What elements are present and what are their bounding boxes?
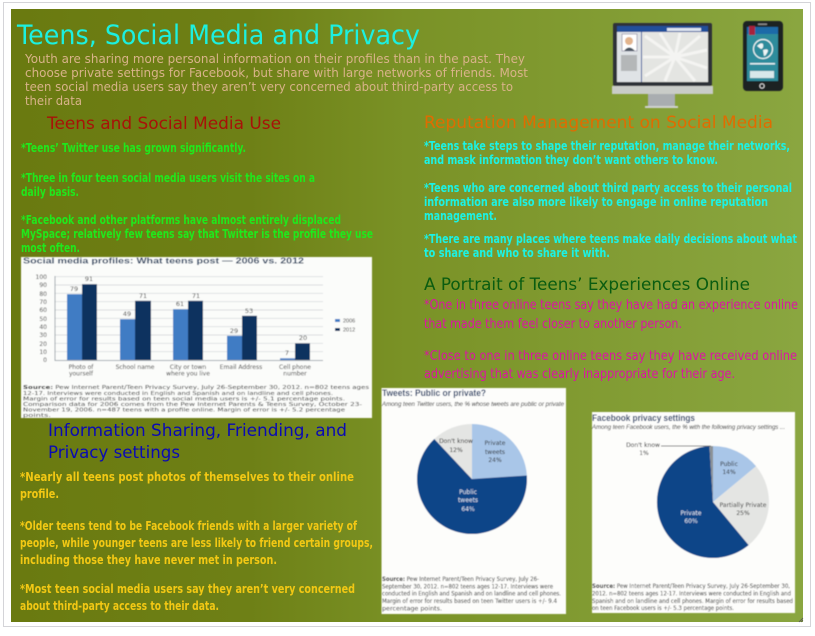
heading: portrait of teens: A Portrait of Teens’ Experiences Online xyxy=(424,275,750,295)
bar chart: what teens post: 70 xyxy=(39,299,47,306)
text block: social media use: MySpace; relatively few teens say that Twitter is the profile they use xyxy=(21,226,373,241)
text block: information sharing xyxy=(20,469,373,613)
text block: portrait of teens: that made them feel closer to another person. xyxy=(424,317,682,332)
bar chart: what teens post: Cell phone xyxy=(279,364,311,371)
bar chart: what teens post: 91 xyxy=(85,275,93,283)
pie chart: facebook privacy settings: Private xyxy=(681,510,702,517)
title: Teens, Social Media and Privacy xyxy=(16,20,420,51)
text block: information sharing: *Older teens tend to be Facebook friends with a larger variety of xyxy=(20,518,357,533)
pie chart: tweets public or private: 64% xyxy=(461,506,475,513)
text block: reputation management: and mask information they don’t want others to know. xyxy=(424,152,718,167)
icon: smartphone xyxy=(743,21,783,91)
pie chart: tweets public or private: Private xyxy=(485,440,506,447)
heading: information sharing xyxy=(48,421,347,463)
bar chart: what teens post: November 19, 2006. n=487 teens with a profile online. Margin of error is +/- 5.2 percentage xyxy=(23,408,346,414)
bar chart: what teens post: 60 xyxy=(39,307,47,314)
intro paragraph: teen social media users say they aren’t very concerned about third-party access to xyxy=(25,80,513,95)
bar chart: what teens post: 50 xyxy=(39,316,47,323)
pie chart: facebook privacy settings: 25% xyxy=(736,510,750,517)
pie chart: tweets public or private: tweets xyxy=(485,449,505,456)
text block: social media use: *Three in four teen social media users visit the sites on a xyxy=(21,170,315,185)
pie chart: tweets public or private: tweets xyxy=(458,497,478,504)
pie chart: tweets public or private: 24% xyxy=(488,457,502,464)
pie chart: facebook privacy settings: 1% xyxy=(639,450,649,457)
text block: information sharing: about third-party access to their data. xyxy=(20,598,219,613)
text block: social media use: daily basis. xyxy=(21,184,79,199)
pie chart: facebook privacy settings: Don't know xyxy=(626,442,660,449)
pie chart: tweets public or private: conducted in English and Spanish and on landline and cell phones. xyxy=(382,590,561,598)
intro paragraph: Youth are sharing more personal information on their profiles than in the past. They xyxy=(24,52,525,67)
bar chart: what teens post: 71 xyxy=(139,292,147,300)
pie chart: facebook privacy settings: Public xyxy=(720,461,738,468)
bar chart: what teens post: 20 xyxy=(39,341,47,348)
intro paragraph: their data xyxy=(25,94,82,109)
bar chart: what teens post: Email Address xyxy=(220,364,262,371)
text block: social media use xyxy=(21,140,373,255)
pie chart: facebook privacy settings: 60% xyxy=(684,518,698,525)
bar chart: what teens post: Comparison data for 2006 comes from the Pew Internet Parents & Teens Survey, October 23- xyxy=(23,402,362,408)
bar chart: what teens post: number xyxy=(283,370,307,378)
pie chart: facebook privacy settings: on teen Facebook users is +/- 5.3 percentage points. xyxy=(592,605,734,612)
pie chart: facebook privacy settings: 14% xyxy=(722,469,736,476)
pie chart: tweets public or private: Don't know xyxy=(439,438,473,445)
text block: information sharing: people, while younger teens are less likely to friend certain groups, xyxy=(20,535,373,550)
bar chart: what teens post: yourself xyxy=(69,370,94,378)
bar chart: what teens post: 12-17. Interviews were conducted in English and Spanish and on landline and cell phones. xyxy=(23,391,333,397)
pie chart: tweets public or private: 12% xyxy=(449,447,463,454)
pie chart: facebook privacy settings: Partially Private xyxy=(720,502,767,509)
heading: teens and social media use: Teens and Social Media Use xyxy=(46,114,281,134)
bar chart: what teens post: Social media profiles: What teens post — 2006 vs. 2012 xyxy=(23,256,305,266)
text block: social media use: *Facebook and other platforms have almost entirely displaced xyxy=(21,212,341,227)
pie chart: tweets public or private: Among teen Twitter users, the % whose tweets are public or private xyxy=(381,402,565,408)
bar chart: what teens post: where you live xyxy=(166,370,210,378)
pie chart: tweets public or private: Margin of error for results based on teen Twitter users is +/- 9.4 xyxy=(382,598,557,605)
bar chart: what teens post: School name xyxy=(116,364,155,371)
bar chart: what teens post: 20 xyxy=(299,334,307,342)
icon: desktop monitor xyxy=(612,23,713,108)
bar chart: what teens post: 90 xyxy=(39,282,47,289)
bar chart: what teens post: City or town xyxy=(170,364,206,371)
bar chart: what teens post: 80 xyxy=(39,291,47,298)
text block: information sharing: *Nearly all teens post photos of themselves to their online xyxy=(20,469,354,484)
bar chart: what teens post: 30 xyxy=(39,332,47,339)
bar chart: what teens post: 61 xyxy=(176,300,184,308)
text block: social media use: most often. xyxy=(21,240,80,255)
text block: social media use: *Teens’ Twitter use has grown significantly. xyxy=(21,140,246,155)
pie chart: facebook privacy settings: Facebook privacy settings xyxy=(592,413,695,423)
text block: reputation management xyxy=(424,138,797,260)
intro paragraph: choose private settings for Facebook, but share with large networks of friends. Most xyxy=(25,66,528,81)
pie chart: tweets public or private xyxy=(381,388,566,614)
text block: portrait of teens xyxy=(424,298,798,382)
pie chart: facebook privacy settings: 2012. n=802 teens ages 12-17. Interviews were conducted in English and xyxy=(592,590,791,598)
text block: information sharing: including those they have never met in person. xyxy=(20,552,277,567)
heading: information sharing: Privacy settings xyxy=(48,443,180,463)
intro paragraph xyxy=(24,52,528,109)
pie chart: tweets public or private: Public xyxy=(459,489,477,496)
bar chart: what teens post xyxy=(21,256,372,419)
bar chart: what teens post: 79 xyxy=(70,285,78,293)
bar chart: what teens post: 49 xyxy=(123,310,131,318)
bar chart: what teens post: 10 xyxy=(39,349,47,356)
text block: reputation management: management. xyxy=(424,208,497,223)
bar chart: what teens post: 40 xyxy=(39,324,47,331)
bar chart: what teens post: Photo of xyxy=(69,364,94,371)
pie chart: tweets public or private: September 30, 2012. n=802 teens ages 12-17. Interviews were xyxy=(382,584,553,590)
bar chart: what teens post: 71 xyxy=(192,292,200,300)
heading: reputation management: Reputation Management on Social Media xyxy=(424,113,773,133)
bar chart: what teens post: 0 xyxy=(43,357,47,364)
text block: information sharing: profile. xyxy=(20,486,59,501)
text block: portrait of teens: advertising that was clearly inappropriate for their age. xyxy=(424,367,735,382)
text block: reputation management: to share and who to share it with. xyxy=(424,245,610,260)
bar chart: what teens post: 100 xyxy=(36,274,47,281)
bar chart: what teens post: 2012 xyxy=(343,328,355,334)
pie chart: facebook privacy settings: Among teen Facebook users, the % with the following privacy settings ... xyxy=(591,425,785,431)
pie chart: facebook privacy settings: Spanish and on landline and cell phones. Margin of error for results based xyxy=(592,598,793,605)
heading: information sharing: Information Sharing, Friending, and xyxy=(48,421,347,441)
pie chart: tweets public or private: Source: Pew Internet Parent/Teen Privacy Survey, July 26- xyxy=(382,576,539,583)
bar chart: what teens post: Source: Pew Internet Parent/Teen Privacy Survey, July 26-September 30, 2012. n=802 teens ages xyxy=(23,385,369,391)
bar chart: what teens post: Margin of error for results based on teen social media users is +/- 5.1 percentage points. xyxy=(23,396,345,402)
pie chart: tweets public or private: percentage points. xyxy=(382,606,442,612)
bar chart: what teens post: 2006 xyxy=(343,318,355,324)
pie chart: tweets public or private: Tweets: Public or private? xyxy=(382,388,486,398)
bar chart: what teens post: points. xyxy=(23,413,51,419)
pie chart: facebook privacy settings: Source: Pew Internet Parent/Teen Privacy Survey, July 26-September 30, xyxy=(592,583,790,590)
text block: information sharing: *Most teen social media users say they aren’t very concerned xyxy=(20,581,355,596)
bar chart: what teens post: 7 xyxy=(285,349,289,357)
bar chart: what teens post: 29 xyxy=(230,327,238,335)
bar chart: what teens post: 53 xyxy=(245,307,253,315)
pie chart: facebook privacy settings xyxy=(591,412,795,613)
